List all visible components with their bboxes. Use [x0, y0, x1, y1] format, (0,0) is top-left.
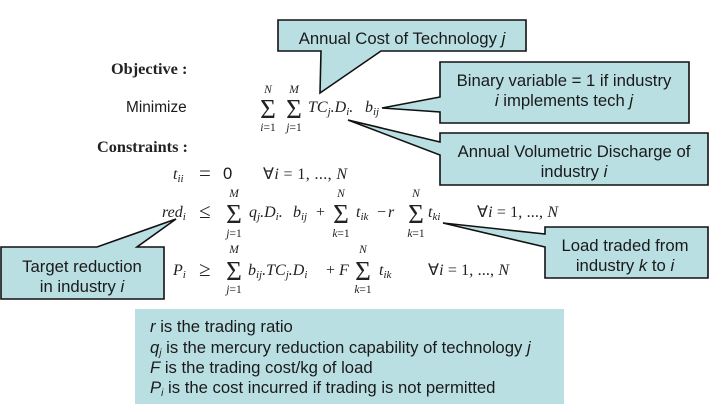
constraint: t_ii equals zero: t	[173, 166, 177, 183]
heading: constraints: Constraints :	[97, 137, 188, 156]
constraint: penalty cost: i	[304, 269, 307, 281]
callout: binary variable: Binary variable = 1 if industry	[457, 71, 672, 90]
constraint: reduction: i	[183, 211, 186, 223]
constraint: reduction: k=1	[332, 228, 350, 240]
objective formula: TC	[308, 99, 328, 116]
definition: q_j: j	[157, 348, 162, 359]
constraint: t_ii equals zero: 0	[223, 164, 232, 183]
constraint: reduction: −	[377, 204, 386, 221]
constraint: penalty cost: Σ	[355, 256, 371, 286]
constraint: reduction: ∀i = 1, ..., N	[477, 204, 559, 221]
constraint: reduction	[162, 188, 559, 240]
constraint: reduction: +	[316, 204, 325, 221]
constraint: penalty cost: t	[379, 262, 383, 279]
callout: annual volumetric discharge: Annual Volumetric Discharge of	[458, 142, 691, 161]
panel: symbol definitions	[135, 309, 564, 404]
constraint: reduction: r	[388, 204, 395, 221]
heading: objective: Objective :	[111, 59, 187, 78]
objective formula: ij	[373, 106, 379, 118]
constraint: penalty cost: j=1	[224, 284, 242, 296]
constraint: reduction: t	[428, 204, 432, 221]
constraint: penalty cost: ≥	[199, 257, 211, 281]
constraint: penalty cost: j	[284, 269, 289, 281]
callout: load traded: industry k to i	[576, 256, 675, 275]
constraint: reduction: t	[356, 204, 360, 221]
objective formula: Σ	[286, 94, 302, 124]
constraint: penalty cost: N	[358, 244, 368, 256]
objective formula: b	[365, 99, 373, 116]
callout: target reduction: in industry i	[40, 277, 125, 296]
objective formula: j	[326, 106, 331, 118]
constraint: t_ii equals zero: ii	[177, 173, 184, 185]
callout: binary variable: i implements tech j	[495, 91, 634, 110]
constraint: reduction: .D	[260, 204, 276, 221]
constraint: reduction: j=1	[224, 228, 242, 240]
constraint: reduction: ik	[360, 211, 370, 223]
constraint: reduction: Σ	[333, 199, 349, 229]
callout: annual cost of technology: Annual Cost of Technology j	[299, 29, 507, 48]
constraint: reduction: i	[276, 211, 279, 223]
constraint: reduction: q	[249, 204, 257, 221]
constraint: penalty cost: .TC	[262, 262, 286, 279]
constraint: penalty cost: b	[248, 262, 256, 279]
definition: P_i: i	[161, 388, 164, 399]
callout: load traded	[443, 223, 708, 278]
constraint: penalty cost: .D	[289, 262, 305, 279]
callout: binary variable	[382, 62, 689, 123]
callout: target reduction: Target reduction	[22, 257, 142, 276]
constraint: reduction: k=1	[407, 228, 425, 240]
constraint: penalty cost: ik	[383, 269, 393, 281]
constraint: reduction: Σ	[408, 199, 424, 229]
constraint: penalty cost: Σ	[226, 256, 242, 286]
constraint: reduction: M	[228, 188, 240, 200]
constraint: reduction: ≤	[199, 199, 211, 223]
constraint: penalty cost: P	[173, 262, 183, 279]
constraint: t_ii equals zero: ∀i = 1, ..., N	[263, 166, 348, 183]
objective formula: j=1	[284, 122, 302, 134]
constraint: reduction: .	[279, 204, 283, 221]
constraint: reduction: j	[255, 211, 260, 223]
definition: P_i: is the cost incurred if trading is not permitted	[163, 378, 495, 397]
constraint: reduction: Σ	[226, 199, 242, 229]
callout: annual volumetric discharge: industry i	[541, 162, 609, 181]
constraint: reduction: N	[411, 188, 421, 200]
definition: q_j: j	[525, 338, 532, 357]
callout: target reduction	[1, 219, 176, 299]
constraint: penalty cost	[172, 244, 510, 296]
constraint: reduction: red	[162, 204, 183, 221]
objective formula: i=1	[260, 122, 276, 134]
constraint: penalty cost: i	[183, 269, 186, 281]
objective formula: M	[288, 84, 300, 96]
constraint: t_ii equals zero	[173, 161, 348, 185]
definition: F: F is the trading cost/kg of load	[150, 358, 373, 377]
constraint: reduction: ij	[301, 211, 307, 223]
objective formula: N	[263, 84, 273, 96]
constraint: penalty cost: k=1	[354, 284, 372, 296]
constraint: penalty cost: F	[338, 262, 349, 279]
callout: load traded: Load traded from	[561, 236, 689, 255]
constraint: penalty cost: M	[228, 244, 240, 256]
objective formula: .	[349, 99, 353, 116]
objective formula: .D	[331, 99, 347, 116]
callout: annual cost of technology	[278, 20, 526, 93]
label: minimize: Minimize	[126, 99, 187, 116]
constraint: reduction: b	[293, 204, 301, 221]
objective formula: Σ	[260, 94, 276, 124]
definition: P_i: P	[150, 378, 162, 397]
constraint: penalty cost: ∀i = 1, ..., N	[428, 262, 510, 279]
callout: annual volumetric discharge	[348, 120, 708, 185]
definition: q_j: is the mercury reduction capability of technology	[162, 338, 527, 357]
constraint: reduction: ki	[432, 211, 440, 223]
objective formula: i	[346, 106, 349, 118]
definition: r: r is the trading ratio	[150, 317, 293, 336]
constraint: reduction: N	[336, 188, 346, 200]
definition: q_j: q	[150, 338, 160, 357]
objective formula	[260, 84, 379, 134]
constraint: t_ii equals zero: =	[199, 161, 211, 185]
constraint: penalty cost: +	[326, 262, 335, 279]
constraint: penalty cost: ij	[256, 269, 262, 281]
